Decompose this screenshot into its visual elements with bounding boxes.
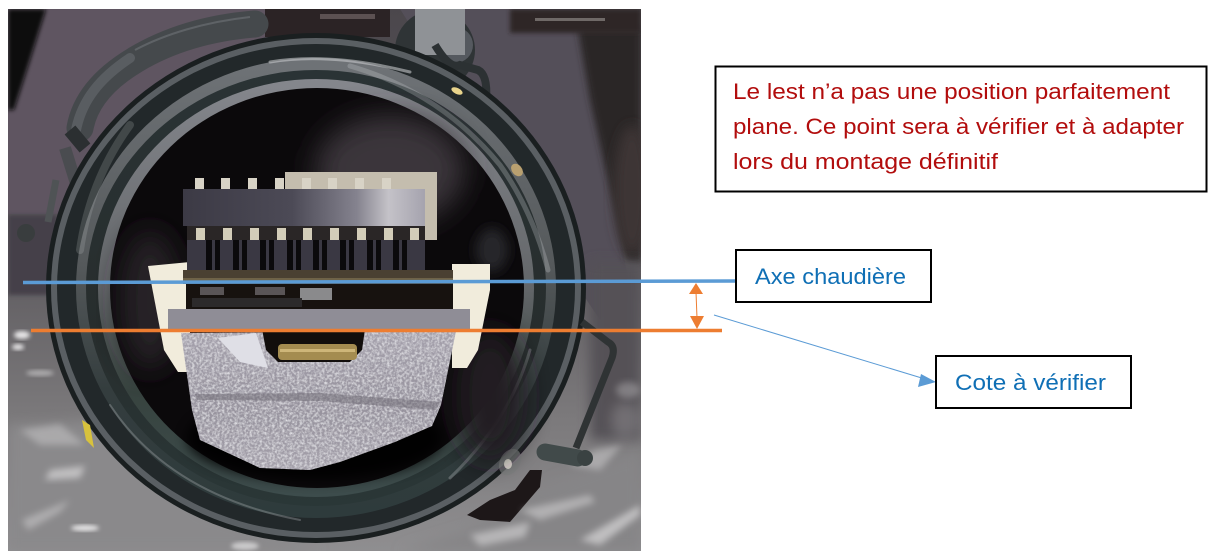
top pin row <box>195 178 391 189</box>
top header block <box>183 189 425 226</box>
label: Cote à vérifier: Cote à vérifier <box>955 370 1107 395</box>
note box: Le lest n’a pas une position parfaitement <box>733 79 1171 104</box>
gap with pins <box>187 226 425 240</box>
label: Axe chaudière <box>736 250 931 302</box>
bubble wrap highlights <box>12 331 640 550</box>
lower header block <box>187 240 425 270</box>
note box: plane. Ce point sera à vérifier et à adapter <box>733 114 1185 139</box>
label: Cote à vérifier <box>936 356 1131 408</box>
cream cylinders <box>285 172 437 240</box>
photo: boiler ring with electronics and lead ballast <box>8 9 650 551</box>
boiler ring <box>46 33 586 543</box>
note box: lors du montage définitif <box>733 149 999 174</box>
orange reference line <box>31 329 722 332</box>
ballast crease <box>195 393 440 410</box>
lead ballast <box>181 329 456 480</box>
ring interior shading <box>120 115 524 460</box>
thin blue arrow to label <box>714 315 936 387</box>
foil flake <box>218 333 268 368</box>
electronics module <box>148 172 490 372</box>
worn paint highlights <box>80 59 548 520</box>
label: Axe chaudière: Axe chaudière <box>755 264 906 289</box>
left white mount <box>148 262 190 372</box>
blue axis line <box>23 281 735 282</box>
note box <box>716 66 1206 192</box>
photo background <box>8 9 650 551</box>
coiled hose <box>17 17 255 242</box>
right white mount <box>452 264 490 368</box>
ring opening <box>110 88 524 488</box>
dark block under ring <box>467 470 542 522</box>
grey plate <box>168 309 470 329</box>
notch and brass insert <box>262 329 365 362</box>
orange double arrow <box>689 283 704 329</box>
circuit board <box>183 270 453 284</box>
boiler top fitting <box>265 9 486 100</box>
right clip and pin <box>545 322 613 466</box>
